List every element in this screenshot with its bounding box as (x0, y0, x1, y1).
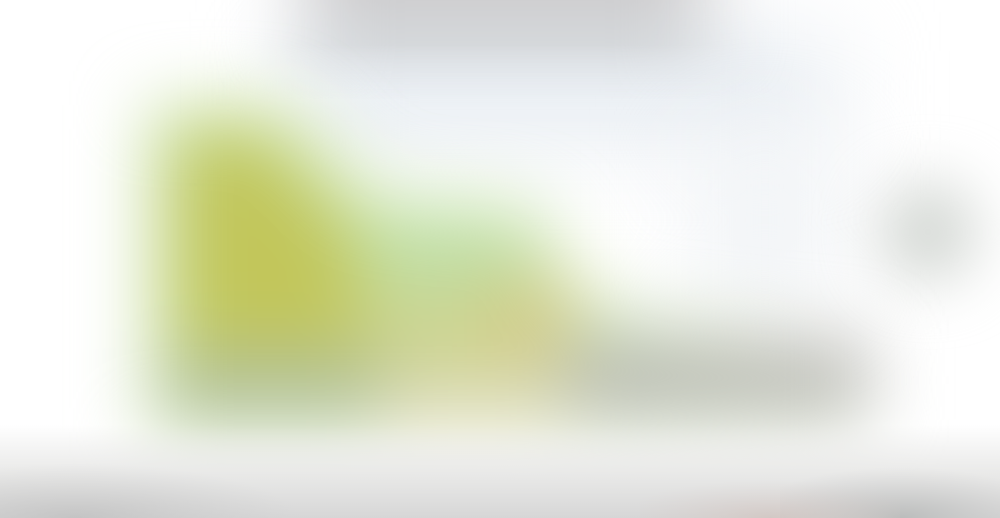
right-side haze (700, 140, 830, 300)
chart: grey low series (565, 340, 870, 415)
chart: base shadow left (165, 352, 380, 420)
title heading band (305, 0, 705, 100)
header haze (300, 45, 830, 130)
chart: pale olive section (365, 290, 490, 375)
right circular icon (878, 182, 978, 282)
chart: base pale right (380, 372, 565, 430)
chart: tan column (485, 280, 570, 365)
chart: light green silhouette (148, 105, 870, 432)
footer band (0, 425, 1000, 518)
chart: olive tall column (178, 135, 365, 350)
chart area (148, 105, 870, 432)
chart: mid green section (375, 225, 530, 290)
